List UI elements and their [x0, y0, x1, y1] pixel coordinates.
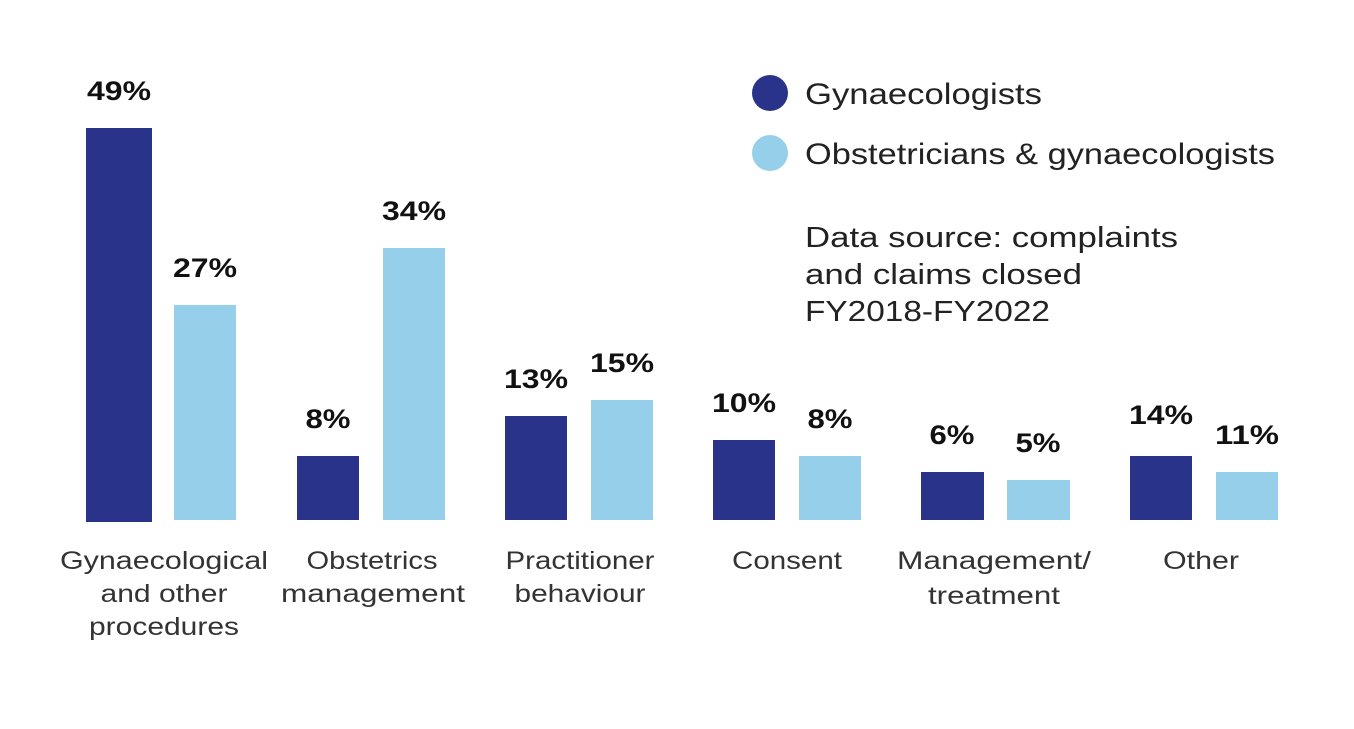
group: Gynaecological and other procedures: 49%	[87, 76, 151, 106]
group: Management/treatment: 6%	[930, 420, 974, 450]
group: Consent: 8%	[808, 404, 852, 434]
group: Gynaecological and other procedures: procedures	[89, 613, 239, 641]
group: Gynaecological and other procedures: 27%	[173, 253, 237, 283]
group: Management/treatment: treatment	[928, 582, 1060, 610]
data source note: FY2018-FY2022	[805, 296, 1050, 328]
group: Gynaecological and other procedures	[60, 76, 268, 641]
group: Consent	[712, 388, 861, 575]
group: Practitioner behaviour: 15%	[590, 348, 654, 378]
group: Obstetrics management	[281, 196, 465, 608]
group: Practitioner behaviour	[504, 348, 654, 608]
group: Obstetrics management: Obstetrics	[306, 547, 438, 575]
data source note	[805, 222, 1178, 328]
group: Management/treatment: 5%	[1016, 428, 1060, 458]
data source note: and claims closed	[805, 259, 1082, 291]
bar chart	[60, 76, 1279, 641]
group: Other: 11%	[1215, 420, 1279, 450]
legend: Obstetricians & gynaecologists	[805, 138, 1275, 171]
group: Practitioner behaviour: behaviour	[514, 580, 646, 608]
legend	[752, 75, 1275, 171]
group: Management/treatment	[897, 420, 1091, 610]
group: Obstetrics management: 8%	[306, 404, 350, 434]
group: Other	[1129, 400, 1279, 575]
group: Consent: 10%	[712, 388, 776, 418]
group: Other: Other	[1163, 547, 1239, 575]
group: Gynaecological and other procedures: and other	[100, 580, 228, 608]
group: Obstetrics management: 34%	[382, 196, 446, 226]
group: Gynaecological and other procedures: Gynaecological	[60, 547, 268, 575]
group: Obstetrics management: management	[281, 580, 465, 608]
group: Consent: Consent	[732, 547, 842, 575]
group: Other: 14%	[1129, 400, 1193, 430]
group: Practitioner behaviour: Practitioner	[506, 547, 654, 575]
data source note: Data source: complaints	[805, 222, 1178, 254]
legend: Gynaecologists	[805, 78, 1042, 111]
group: Management/treatment: Management/	[897, 547, 1091, 575]
group: Practitioner behaviour: 13%	[504, 364, 568, 394]
